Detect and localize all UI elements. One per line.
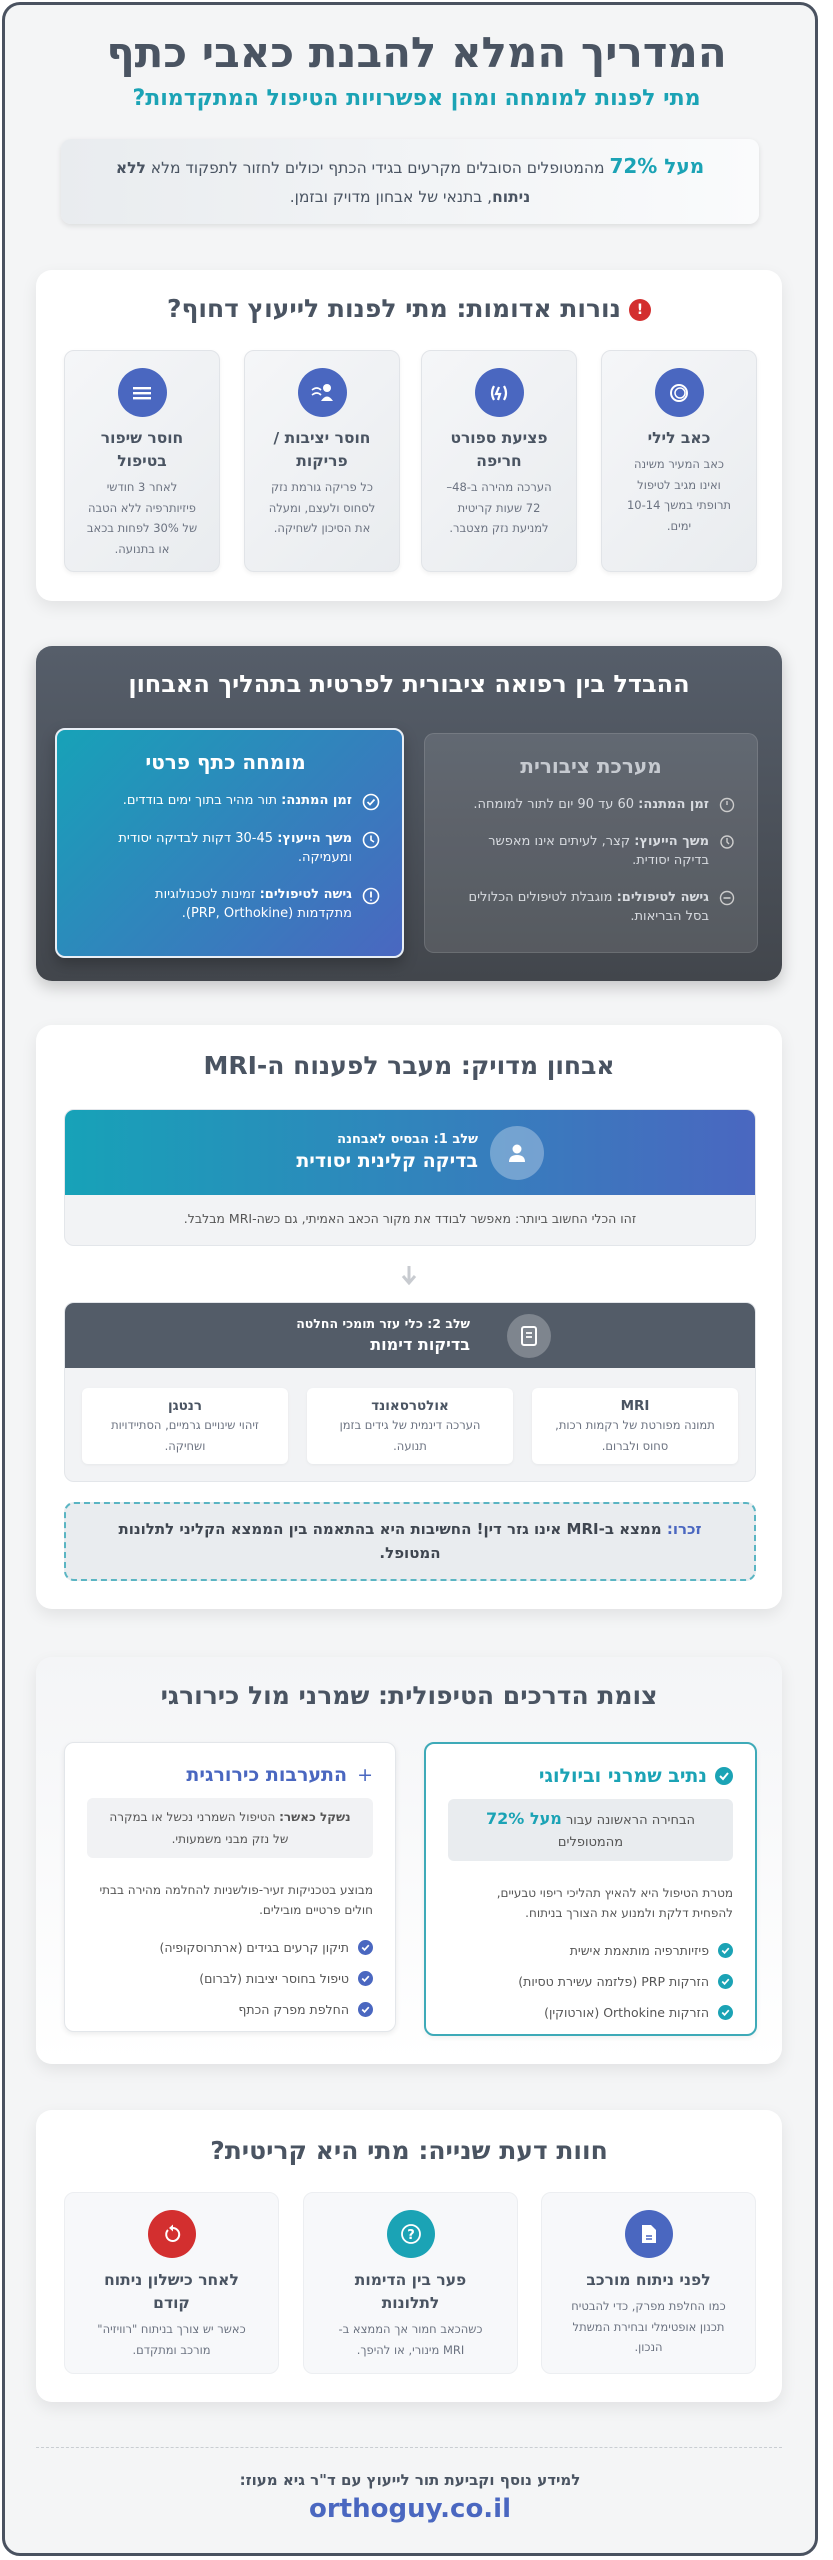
card: private expert: מומחה כתף פרטי (145, 750, 306, 774)
card: conservative: מטרת הטיפול היא להאיץ תהליכי ריפוי טבעיים, (497, 1886, 733, 1900)
card: instability: כל פריקה גורמת נזק לסחוס ולעצם, ומעלה את הסיכון לשחיקה. (269, 480, 375, 535)
footer link: orthoguy.co.il (309, 2494, 511, 2524)
card: sport injury: פציעת ספורט (450, 429, 548, 447)
item: access (155, 887, 380, 921)
sub: MRI: תמונה מפורטת של רקמות רכות, (555, 1418, 715, 1432)
footer text: למידע נוסף וקביעת תור לייעוץ עם ד"ר גיא מעוז: (240, 2471, 580, 2489)
step 2 header (65, 1303, 755, 1368)
card: conservative: נתיב שמרני וביולוגי (539, 1765, 707, 1787)
step 2 header: בדיקות דימות (370, 1335, 470, 1354)
item: access: גישה לטיפולים: זמינות לטכנולוגיות (155, 887, 352, 902)
card: public system: מערכת ציבורית (520, 754, 662, 778)
card: sport injury (421, 350, 577, 572)
icon: person (490, 1126, 544, 1180)
sub: ultrasound: אולטרסאונד (371, 1398, 449, 1414)
item: wait: זמן המתנה: 60 עד 90 יום לתור למומחה. (473, 797, 709, 812)
card: night pain: כאב המעיר משינה ואינו מגיב לטיפול תרופתי במשך 10-14 ימים. (627, 457, 731, 532)
card: sport injury: הערכה מהירה ב-48–72 שעות קריטית למניעת נזק מצטבר. (446, 480, 552, 535)
divider (36, 2447, 782, 2448)
card: surgical (64, 1742, 396, 2032)
card: failed surgery: לאחר כישלון ניתוח (104, 2271, 239, 2289)
sub: x-ray: רנטגן (168, 1398, 202, 1414)
icon: question (386, 2210, 434, 2258)
card: no improvement: בטיפול (117, 452, 167, 470)
step 1 header: בדיקה קלינית יסודית (296, 1150, 478, 1172)
card: sport injury: חריפה (476, 452, 522, 470)
step 1 header: שלב 1: הבסיס לאבחנה (337, 1132, 478, 1147)
icon: injury (474, 368, 524, 417)
panel: red flags (36, 270, 782, 601)
list: surgical: החלפת מפרק הכתף (238, 2002, 349, 2017)
panel: second opinion (36, 2110, 782, 2402)
item: duration (488, 834, 734, 868)
intro callout: מעל 72% מהמטופלים הסובלים מקרעים בגידי הכתף יכולים לחזור לתפקוד מלא ללא (116, 154, 704, 178)
card: public system (424, 733, 758, 953)
icon: circle (654, 368, 704, 417)
card: before complex surgery (541, 2192, 756, 2374)
sub: x-ray: ושחיקה. (165, 1439, 205, 1453)
subtitle: מתי לפנות למומחה ומהן אפשרויות הטיפול המתקדמות? (132, 86, 701, 111)
card: conservative (424, 1742, 757, 2036)
sub: ultrasound (307, 1388, 513, 1464)
list: conservative (518, 1943, 733, 2020)
heading: red flags: נורות אדומות: מתי לפנות לייעוץ דחוף? (167, 294, 621, 323)
panel: MRI diagnosis (36, 1025, 782, 1609)
card: instability: חוסר יציבות / (274, 429, 370, 447)
card: private expert (55, 728, 404, 958)
list: surgical: טיפול בחוסר יציבות (לברום) (199, 1971, 349, 1986)
item: wait: זמן המתנה: תור מהיר בתוך ימים בודדים. (123, 793, 352, 808)
card: before complex surgery: לפני ניתוח מורכב (586, 2271, 711, 2289)
icon: document (507, 1314, 551, 1358)
heading: MRI: אבחון מדויק: מעבר לפענוח ה-MRI (203, 1051, 615, 1080)
highlight: when (87, 1798, 373, 1858)
icon: question: ? (407, 2228, 414, 2243)
card: surgical: +התערבות כירורגית (186, 1764, 373, 1786)
item: access: גישה לטיפולים: מוגבלת לטיפולים הכלולים (468, 890, 709, 905)
highlight: 72% (448, 1799, 733, 1861)
callout: remember: זכרו: ממצא ב-MRI אינו גזר דין! החשיבות היא בהתאמה בין הממצא הקליני לתלונות המטופל. (118, 1520, 702, 1562)
heading: comparison: ההבדל בין רפואה ציבורית לפרטית בתהליך האבחון (128, 670, 690, 698)
item: duration: בדיקה יסודית. (632, 853, 709, 868)
step 2 header: שלב 2: כלי עזר תומכי החלטה (296, 1316, 470, 1331)
card: instability (244, 350, 400, 572)
list: conservative: פיזיותרפיה מותאמת אישית (570, 1943, 709, 1958)
list: conservative: הזרקות Orthokine (אורטוקין) (544, 2005, 709, 2020)
panel: treatment paths (36, 1657, 782, 2064)
sub: MRI: סחוס ולברום. (602, 1439, 668, 1453)
sub: x-ray (82, 1388, 288, 1464)
heading: red flags: ! (637, 302, 643, 318)
item: access: מתקדמות (PRP, Orthokine). (182, 906, 352, 921)
highlight: when: של נזק מבני משמעותי. (172, 1832, 288, 1846)
step 1 (64, 1109, 756, 1246)
intro callout: ניתוח, בתנאי של אבחון מדויק ובזמן. (290, 188, 530, 206)
icon: document (624, 2210, 672, 2258)
card: no improvement (64, 350, 220, 572)
list: surgical (159, 1940, 373, 2017)
card: imaging gap: כשהכאב חמור אך הממצא ב-MRI מינורי, או להיפך. (338, 2322, 483, 2356)
card: before complex surgery: כמו החלפת מפרק, כדי להבטיח תכנון אופטימלי ובחירת המשתל הנכון. (571, 2299, 726, 2354)
card: imaging gap: לתלונות (382, 2294, 439, 2312)
step 2 (64, 1302, 756, 1482)
card: no improvement: חוסר שיפור (101, 429, 183, 447)
item: access: בסל הבריאות. (630, 909, 709, 924)
arrow: down (402, 1266, 416, 1285)
sub: x-ray: זיהוי שינויים גרמיים, הסתיידויות (111, 1418, 259, 1432)
step 1 header (65, 1110, 755, 1195)
sub: ultrasound: תנועה. (393, 1439, 427, 1453)
imaging sub-cards (82, 1388, 738, 1464)
icon: redo (148, 2210, 196, 2258)
card: surgical: מבוצע בטכניקות זעיר-פולשניות להחלמה מהירה בבתי חולים פרטיים מובילים. (99, 1883, 373, 1917)
heading: second opinion: חוות דעת שנייה: מתי היא קריטית? (210, 2136, 608, 2165)
card: instability: פריקות (296, 452, 348, 470)
card: failed surgery: כאשר יש צורך בניתוח "רוויזיה" מורכב ומתקדם. (97, 2322, 246, 2356)
item: duration (118, 831, 380, 865)
heading: treatment: צומת הדרכים הטיפולית: שמרני מול כירורגי (161, 1681, 657, 1710)
card: night pain (601, 350, 757, 572)
item: duration: ומעמיקה. (298, 850, 352, 865)
list: surgical: תיקון קרעים בגידים (ארתרוסקופיה) (159, 1940, 349, 1955)
card: failed surgery: קודם (153, 2294, 190, 2312)
card: conservative: להפחית דלקת ולמנוע את הצורך בניתוח. (525, 1906, 733, 1920)
card: failed surgery (64, 2192, 279, 2374)
card: night pain: כאב לילי (648, 429, 710, 447)
panel: public vs private (36, 646, 782, 981)
list: conservative: הזרקות PRP (פלזמה עשירת טסיות) (518, 1974, 709, 1989)
highlight: 72%: מהמטופלים (558, 1835, 623, 1850)
highlight: 72%: הבחירה הראשונה עבור מעל 72% (486, 1809, 695, 1828)
sub: ultrasound: הערכה דינמית של גידים בזמן (340, 1418, 480, 1432)
intro callout (61, 139, 759, 224)
card: imaging gap (303, 2192, 518, 2374)
step 1: זהו הכלי החשוב ביותר: מאפשר לבודד את מקור הכאב האמיתי, גם כשה-MRI מבלבל. (184, 1211, 636, 1226)
icon: instability (298, 368, 346, 417)
item: duration: משך הייעוץ: קצר, לעיתים אינו מאפשר (488, 834, 709, 849)
card: no improvement: לאחר 3 חודשי פיזיותרפיה ללא הטבה של 30% לפחות בכאב או בתנועה. (87, 480, 197, 556)
sub: MRI (532, 1388, 738, 1464)
icon: lines (118, 368, 166, 417)
item: duration: משך הייעוץ: 30-45 דקות לבדיקה יסודית (118, 831, 352, 846)
title: המדריך המלא להבנת כאבי כתף (106, 28, 727, 77)
sub: MRI: MRI (621, 1398, 649, 1414)
callout: remember (64, 1502, 756, 1581)
item: access (468, 890, 734, 924)
highlight: when: נשקל כאשר: הטיפול השמרני נכשל או במקרה (109, 1810, 351, 1824)
card: imaging gap: פער בין הדימות (355, 2271, 466, 2289)
